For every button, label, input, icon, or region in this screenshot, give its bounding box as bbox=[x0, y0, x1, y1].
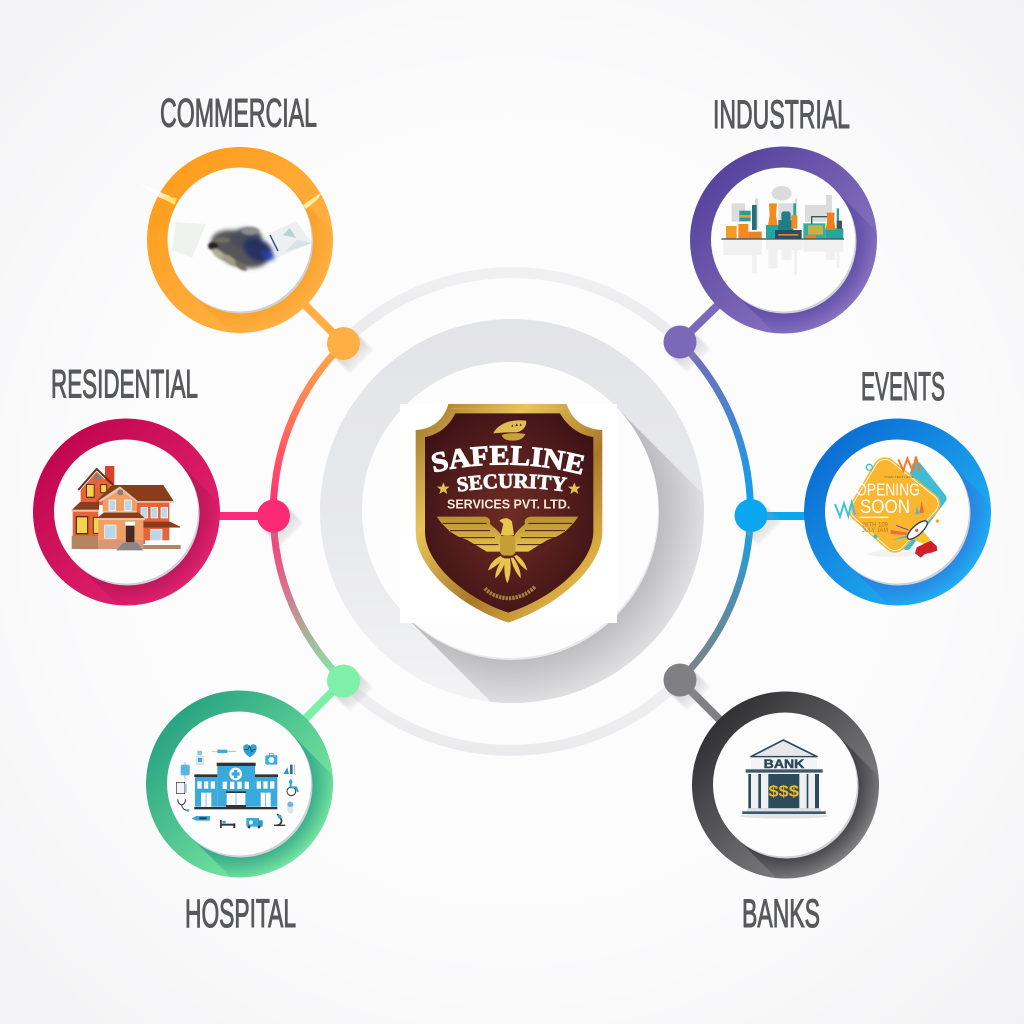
infographic canvas bbox=[33, 98, 991, 928]
icon: opening soon badge: OPENING bbox=[856, 479, 920, 499]
node dot: banks bbox=[664, 664, 696, 696]
left coloured arc bbox=[273, 344, 344, 681]
logo: shield bbox=[416, 404, 602, 623]
outer pale ring bottom bbox=[343, 680, 680, 750]
logo: cap emblem bbox=[493, 420, 526, 441]
icon: bank building bbox=[739, 740, 829, 819]
logo: white backing square bbox=[400, 404, 617, 623]
connectors bbox=[216, 304, 807, 720]
label: banks: BANKS bbox=[742, 892, 820, 936]
outer pale ring top bbox=[343, 273, 680, 343]
label: events: EVENTS bbox=[861, 365, 945, 409]
node dot: events bbox=[734, 499, 768, 532]
node dot: residential bbox=[257, 500, 290, 532]
icon: opening soon badge: 28TH 109 bbox=[862, 521, 888, 528]
logo: star left bbox=[437, 482, 450, 494]
panel: hospital ring bbox=[146, 690, 333, 878]
logo: SAFELINE: SAFELINE bbox=[432, 446, 584, 475]
label: commercial: COMMERCIAL bbox=[160, 92, 317, 136]
white central disc bbox=[362, 362, 659, 660]
logo: laurel bbox=[485, 587, 535, 598]
icon: bank building: BANK bbox=[764, 757, 804, 771]
node dot: commercial bbox=[327, 327, 360, 360]
icon: bank building: $$$ bbox=[768, 783, 800, 800]
panel: banks ring bbox=[692, 692, 879, 878]
logo: eagle bbox=[437, 517, 578, 583]
icon: house bbox=[72, 466, 181, 550]
icon: opening soon badge: SOON bbox=[860, 497, 910, 518]
icon: opening soon badge bbox=[835, 457, 942, 558]
label: industrial: INDUSTRIAL bbox=[713, 93, 850, 137]
panel: events ring bbox=[804, 418, 991, 606]
logo: services text: SERVICES PVT. LTD. bbox=[447, 497, 570, 512]
panel: industrial ring bbox=[690, 146, 877, 334]
icon: opening soon badge: JULY 1AM bbox=[862, 527, 888, 534]
grey central disc bbox=[320, 319, 704, 703]
logo: star right bbox=[568, 482, 581, 494]
label: hospital: HOSPITAL bbox=[185, 892, 296, 936]
label: residential: RESIDENTIAL bbox=[51, 362, 198, 406]
icon: handshake bbox=[172, 221, 312, 275]
right coloured arc bbox=[680, 342, 750, 680]
icon: opening soon badge: YOUR TEXT HERE bbox=[884, 475, 914, 479]
node dot shadows bbox=[262, 331, 781, 711]
node dot: hospital bbox=[327, 664, 360, 698]
long shadow of central disc bbox=[412, 410, 704, 703]
panel: residential ring bbox=[33, 418, 220, 606]
logo: SECURITY: SECURITY bbox=[457, 474, 568, 492]
icon: factory skyline bbox=[721, 186, 844, 275]
node dot: industrial bbox=[664, 326, 696, 358]
panel: commercial ring bbox=[147, 147, 334, 334]
icon: hospital building bbox=[176, 744, 298, 828]
lens flare bbox=[140, 184, 322, 209]
